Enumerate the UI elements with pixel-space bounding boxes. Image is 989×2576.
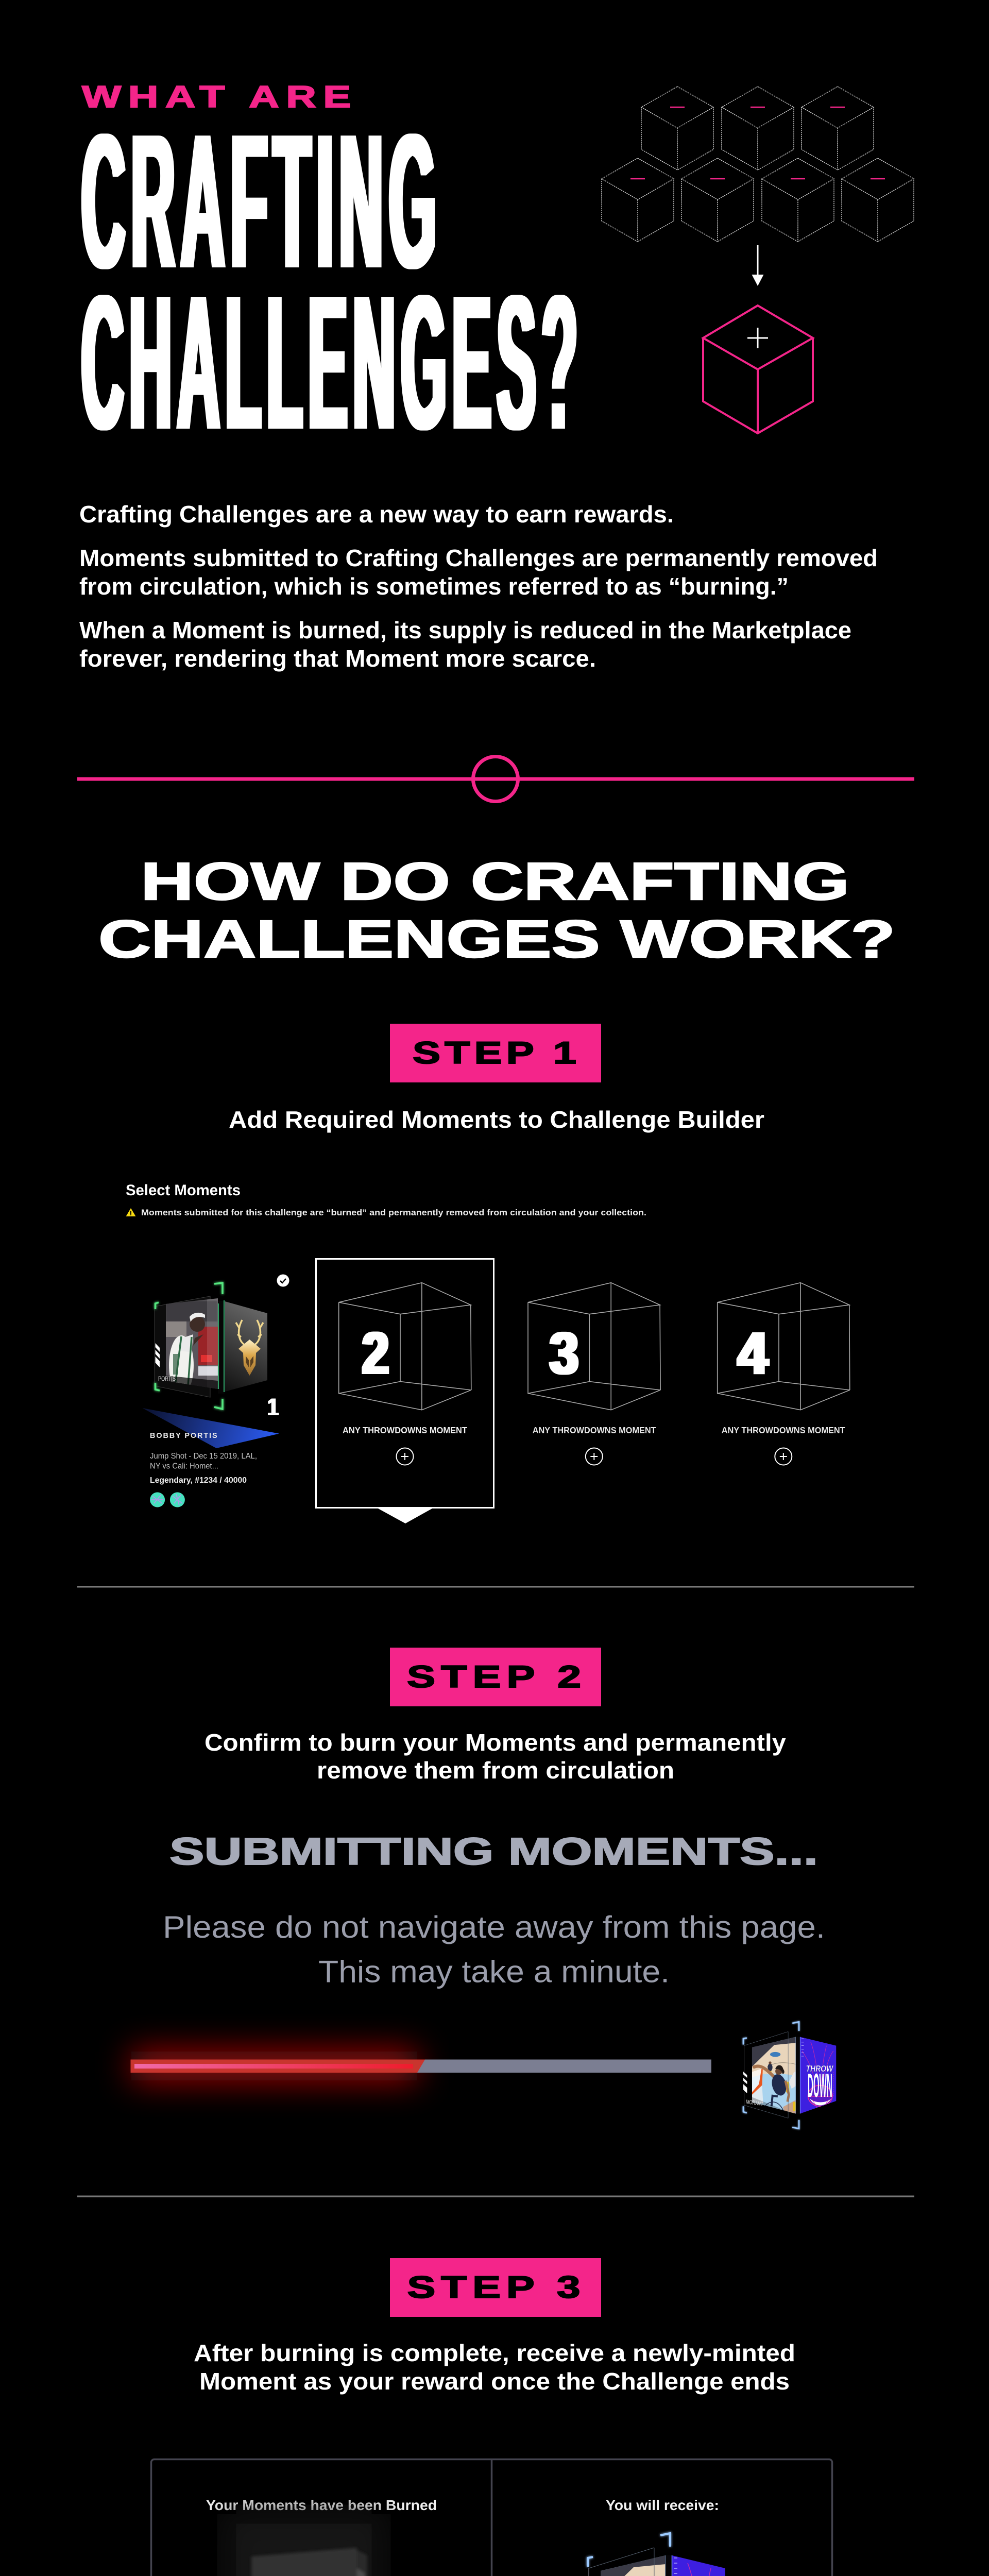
step 2 badge [390,1648,601,1706]
intro text: from circulation, which is sometimes referred to as “burning.” [79,573,789,600]
slot: moment 3: ANY THROWDOWNS MOMENT [533,1425,656,1435]
waiting message: This may take a minute. [318,1955,670,1989]
section divider with circle [77,756,914,802]
eyebrow: what are: WHAT ARE [82,80,358,114]
heading: how do crafting challenges work: HOW DO CRAFTING [141,852,849,911]
icon: badges [150,1492,185,1507]
small reward moment card: THROW [806,2063,833,2074]
warning text: Moments submitted for this challenge are “burned” and permanently removed from circulation and your collection. [141,1208,646,1217]
icon: bucks deer logo [236,1320,263,1376]
step 1 badge: STEP 1 [413,1036,581,1070]
slot: moment 4: 4 [738,1320,768,1386]
heading: submitting moments: SUBMITTING MOMENTS... [169,1830,818,1873]
step 2 description: Confirm to burn your Moments and permanently [204,1729,786,1756]
moment description: Jump Shot - Dec 15 2019, LAL, [150,1452,257,1461]
moment description: NY vs Cali: Homet... [150,1462,218,1470]
slot: moment 3: 3 [550,1320,578,1386]
small reward moment card [743,2022,836,2129]
divider [77,1586,914,1588]
reward moment card [588,2533,725,2576]
title: crafting challenges [81,94,583,469]
icon: warning triangle [126,1208,136,1216]
small reward moment card: MORANT [745,2099,764,2108]
heading: how do crafting challenges work [98,852,895,969]
progress bar [131,2050,711,2081]
intro text: When a Moment is burned, its supply is reduced in the Marketplace [79,617,851,643]
intro text: Moments submitted to Crafting Challenges are permanently removed [79,545,878,571]
waiting message: Please do not navigate away from this page. [163,1910,825,1944]
step 3 badge: STEP 3 [407,2270,586,2304]
intro text [79,501,878,672]
text: DOWN [808,2066,832,2104]
burned cube with flame [227,2514,381,2576]
icon: seven small cubes [602,87,914,242]
intro text: forever, rendering that Moment more scarce. [79,645,596,672]
serial number: Legendary, #1234 / 40000 [150,1476,247,1485]
step 3 description: Moment as your reward once the Challenge ends [199,2368,790,2395]
waiting message [163,1910,825,1989]
step 2 description [204,1729,786,1784]
icon: pink crafted cube [703,306,813,433]
burned heading: Your Moments have been Burned [206,2497,437,2513]
arrow: cubes to crafted cube [752,245,763,286]
step 2 badge: STEP 2 [407,1659,587,1694]
active slot: moment 2 [316,1259,493,1523]
step 2 description: remove them from circulation [317,1757,674,1784]
moment card: bobby portis [155,1283,267,1409]
step 3 description [194,2340,795,2395]
intro text: Crafting Challenges are a new way to earn rewards. [79,501,674,528]
active slot: moment 2: 2 [362,1320,389,1386]
icon: selected check [277,1275,289,1287]
slot number 1: 1 [267,1393,279,1420]
moment description [150,1452,257,1470]
panel: challenge builder [126,1182,850,1523]
blue triangle accent [142,1408,279,1448]
active slot: moment 2: ANY THROWDOWNS MOMENT [343,1425,467,1435]
slot: moment 4 [718,1283,850,1465]
step 3 badge [390,2258,601,2317]
heading: how do crafting challenges work: CHALLENGES WORK? [98,909,895,969]
step 3 description: After burning is complete, receive a newly-minted [194,2340,795,2366]
panel: challenge result [151,2459,832,2576]
slot: moment 3 [528,1283,660,1465]
divider [77,2196,914,2197]
step 1 badge [390,1024,601,1082]
step 1 description: Add Required Moments to Challenge Builder [229,1106,764,1133]
card name on jersey: PORTIS [158,1375,176,1382]
slot: moment 4: ANY THROWDOWNS MOMENT [722,1425,845,1435]
player name: BOBBY PORTIS [150,1431,218,1440]
reward heading: You will receive: [606,2497,719,2513]
select moments heading: Select Moments [126,1182,241,1199]
